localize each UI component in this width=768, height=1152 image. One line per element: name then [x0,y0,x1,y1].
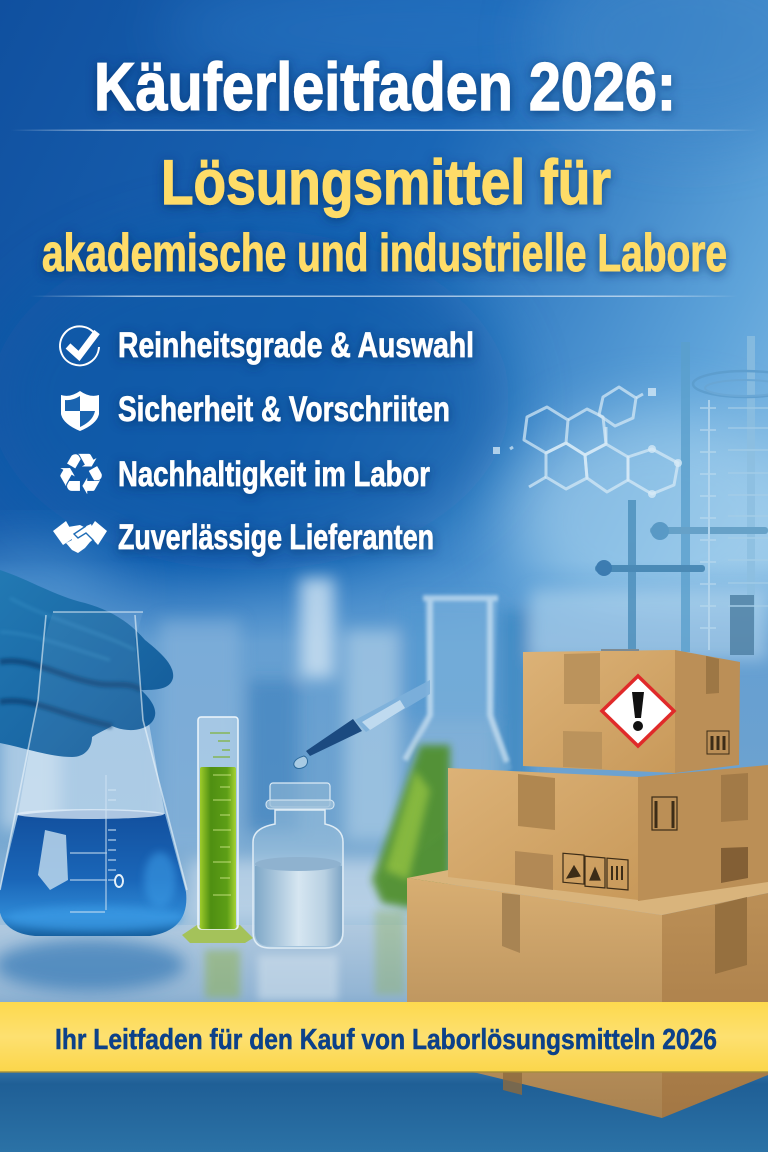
droplet [294,756,308,768]
blue liquid [0,810,186,936]
background lab stand [595,336,768,660]
dropper pipette [294,680,430,768]
cardboard box middle [448,765,768,901]
label: safety: Sicherheit & Vorschriiten [118,390,450,429]
glass jar [253,783,343,948]
molecule diagram [493,387,682,498]
bottom banner [0,1002,768,1073]
handling mark [707,731,729,754]
floor [0,910,768,1152]
icon: shield [61,391,99,431]
gloved hand [0,570,173,757]
cardboard box bottom [407,860,768,1118]
label: suppliers: Zuverlässige Lieferanten [118,518,434,557]
flask [0,612,188,936]
label: sustainability: Nachhaltigkeit im Labor [118,455,430,494]
icon: recycle: ♻ [55,442,107,508]
clear liquid [255,860,342,946]
label: purity: Reinheitsgrade & Auswahl [118,326,474,365]
title block [10,49,758,297]
blurred lab backdrop [0,560,768,940]
icon: check circle [60,326,99,365]
icon: handshake [53,521,107,553]
title line 2: Lösungsmittel für [161,148,611,218]
graduated cylinder [182,717,253,943]
background green flask [372,598,512,908]
flask glass body [18,700,165,815]
cardboard box top [523,649,740,773]
handling symbols [563,797,677,890]
feature list [53,326,474,557]
title line 1: Käuferleitfaden 2026: [94,49,676,125]
hazard diamond [602,676,674,746]
